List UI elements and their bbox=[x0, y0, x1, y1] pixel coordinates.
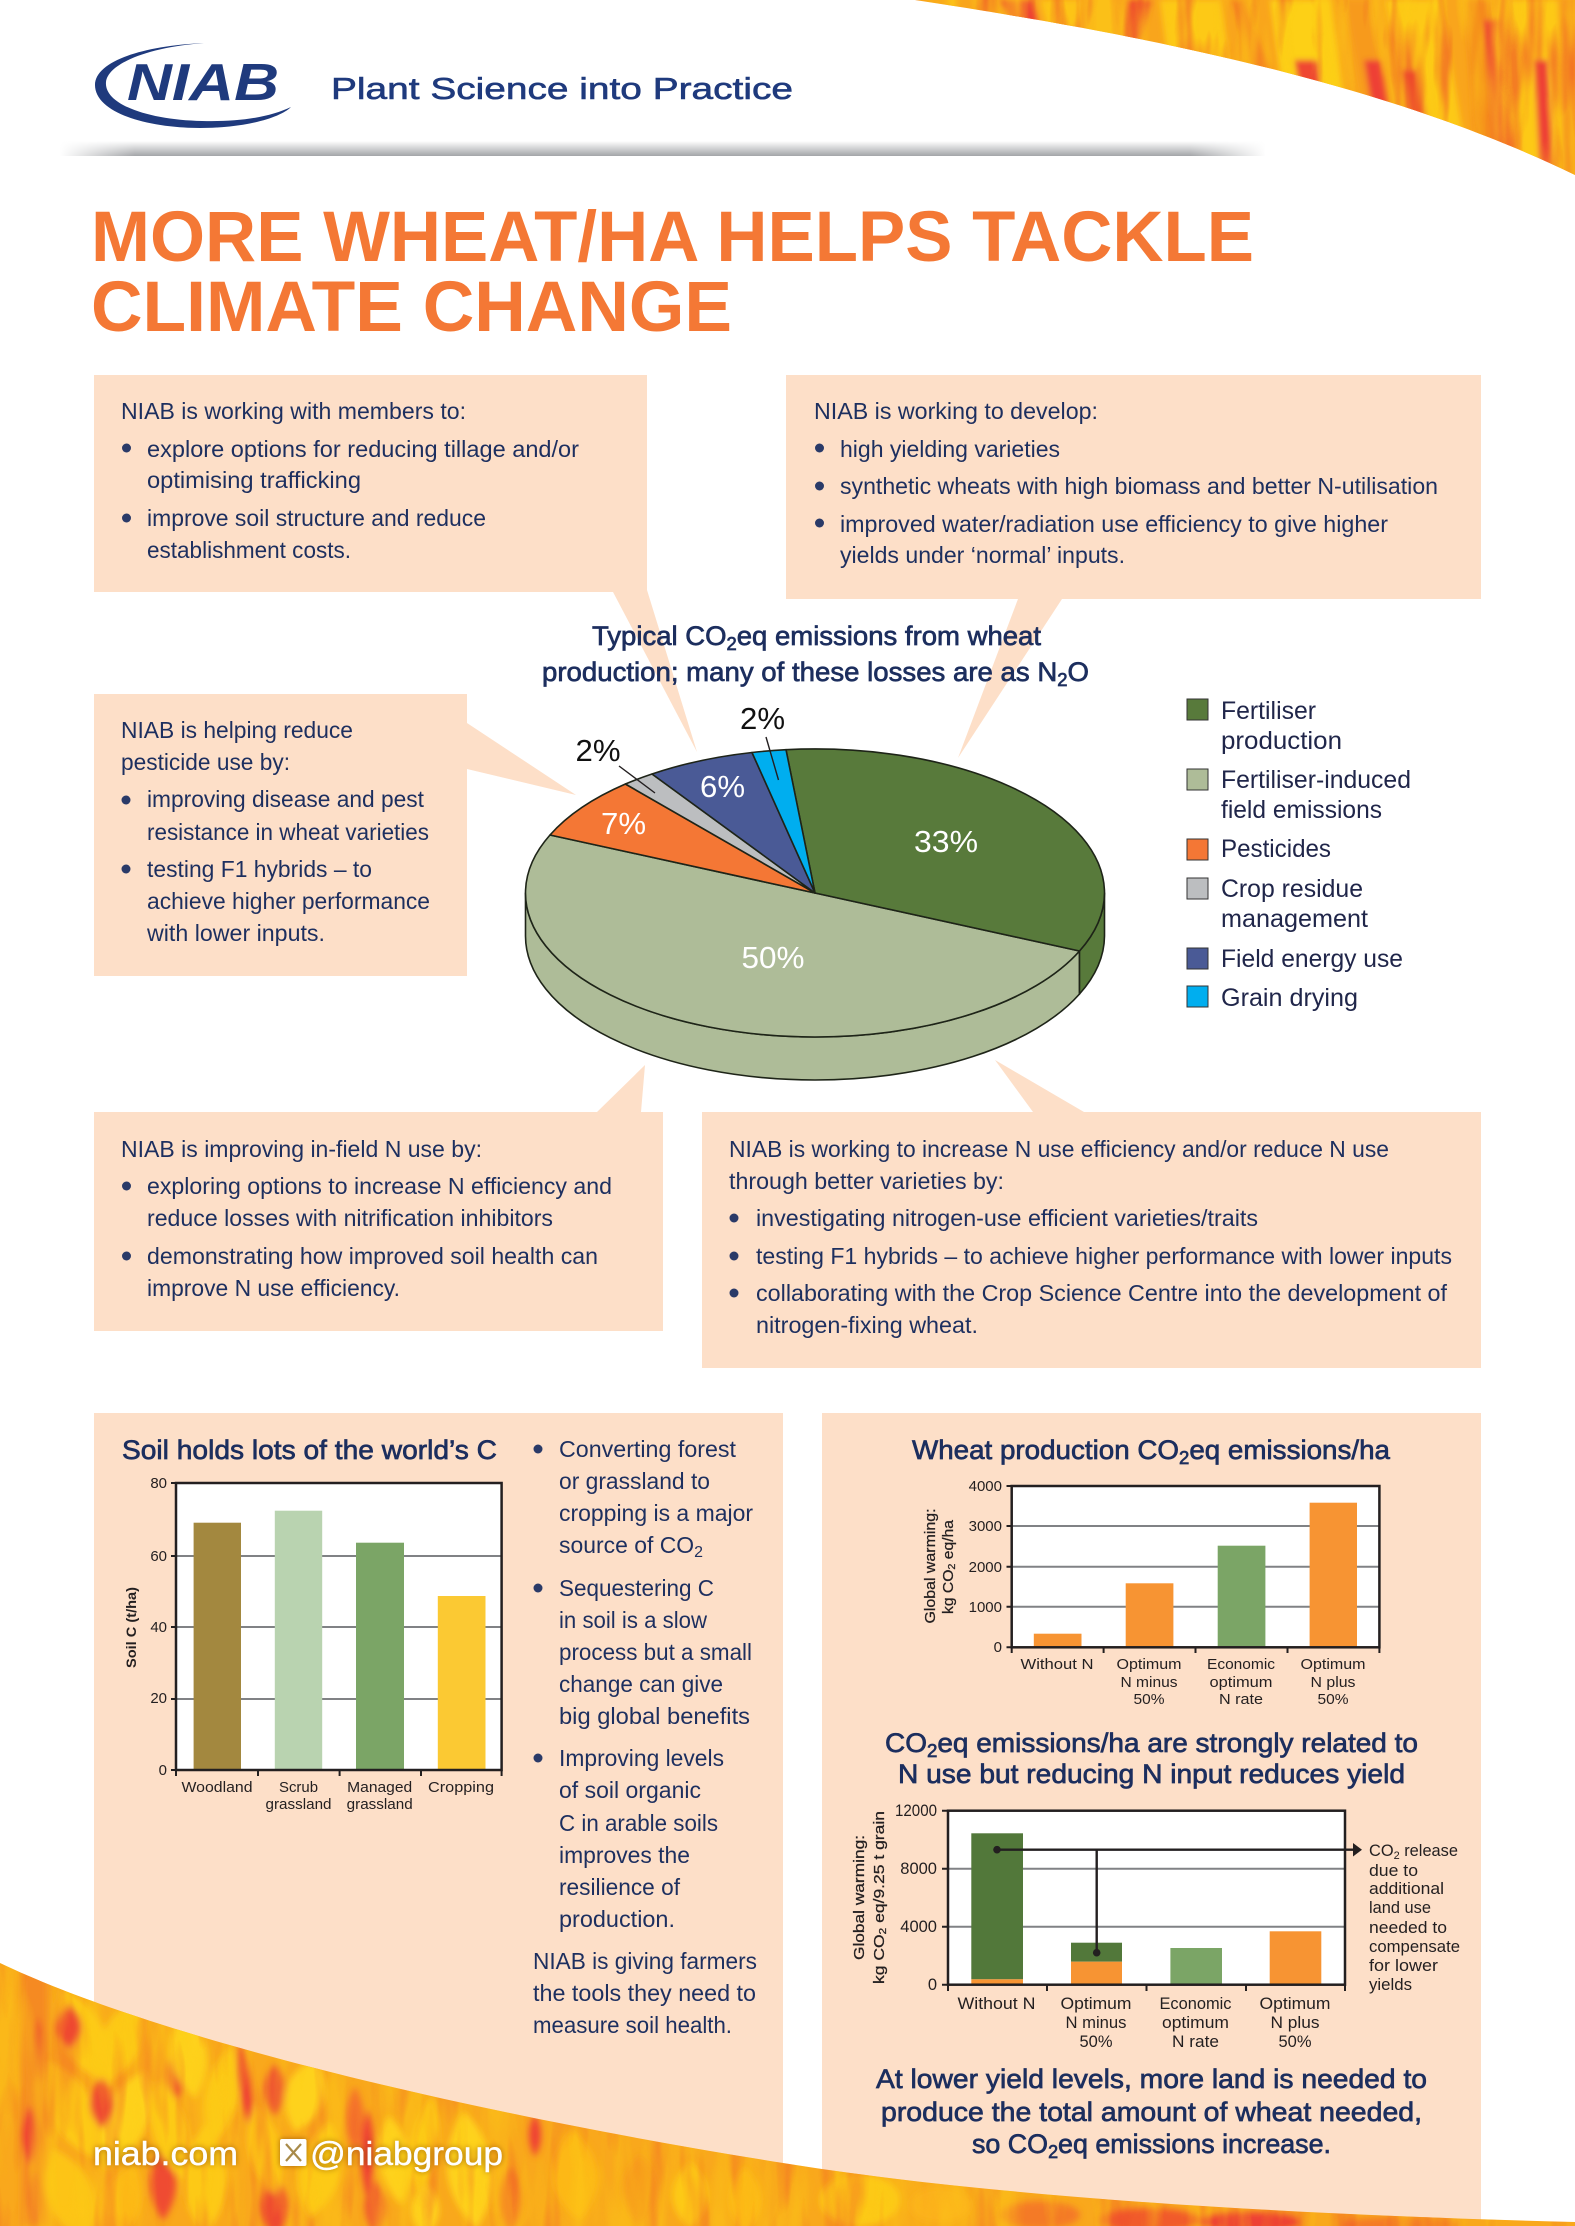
panel: in-field N use: NIAB is improving in-field N use by: bbox=[121, 1136, 482, 1162]
pie legend: Fertiliser-induced bbox=[1221, 766, 1411, 794]
panel: pesticide use: with lower inputs. bbox=[146, 920, 325, 946]
note: CO2 release: additional bbox=[1369, 1880, 1444, 1898]
pie chart: CO2eq emissions: 33% bbox=[914, 824, 978, 859]
panel: wheat production emissions bbox=[822, 1413, 1481, 2226]
leader lines bbox=[619, 737, 778, 793]
bar chart: emissions per yield: N rate bbox=[1172, 2033, 1219, 2051]
note: CO2 release: yields bbox=[1369, 1976, 1412, 1994]
slice: grain drying 2% bbox=[752, 750, 815, 893]
pie legend: field emissions bbox=[1221, 796, 1382, 824]
pie chart heading: eq emissions from wheat bbox=[737, 621, 1042, 651]
heading: emissions per ha: Wheat production CO bbox=[912, 1435, 1172, 1465]
callout box with pointer bbox=[786, 375, 1481, 758]
note: CO2 release: CO bbox=[1369, 1842, 1394, 1860]
heading: related to N use: 2 bbox=[927, 1741, 937, 1761]
bar chart: emissions per yield: 2 bbox=[878, 1927, 889, 1934]
note: CO2 release: compensate bbox=[1369, 1938, 1460, 1956]
panel: pesticide use: testing F1 hybrids – to bbox=[147, 856, 372, 882]
slice: crop residue 2% bbox=[625, 774, 815, 893]
panel: soil carbon bbox=[94, 1413, 783, 2226]
panel: in-field N use: improve N use efficiency. bbox=[147, 1275, 400, 1301]
heading: emissions per ha: 2 bbox=[1179, 1448, 1189, 1468]
bar chart: emissions per ha: Without N bbox=[1020, 1656, 1094, 1673]
panel: N use efficient varieties: through better varieties by: bbox=[729, 1168, 1004, 1194]
panel: in-field N use bbox=[94, 1065, 663, 1331]
note: CO2 release: needed to bbox=[1369, 1919, 1447, 1937]
panel: pesticide use: NIAB is helping reduce bbox=[121, 717, 353, 743]
bar chart: emissions per yield: N plus bbox=[1270, 2014, 1320, 2032]
panel: pesticide use: improving disease and pest bbox=[147, 786, 425, 812]
bar chart: emissions per ha: 4000 bbox=[969, 1478, 1002, 1495]
bar chart: soil C bbox=[123, 1475, 502, 1813]
footer: social handle: @niabgroup bbox=[310, 2135, 503, 2172]
pie legend bbox=[1187, 697, 1411, 1012]
pie legend: management bbox=[1221, 905, 1368, 933]
title: MORE WHEAT/HA HELPS TACKLE bbox=[91, 198, 1254, 277]
bar chart: emissions per yield: N minus bbox=[1066, 2014, 1126, 2032]
panel: varieties: high yielding varieties bbox=[840, 436, 1060, 462]
panel: pesticide use: pesticide use by: bbox=[121, 749, 290, 775]
bar chart: soil C: Managed bbox=[347, 1779, 412, 1796]
bar chart: soil C: 60 bbox=[150, 1548, 167, 1565]
panel: tillage and trafficking: NIAB is working with members to: bbox=[121, 398, 466, 424]
panel: varieties: improved water/radiation use efficiency to give higher bbox=[840, 511, 1388, 537]
panel: varieties: NIAB is working to develop: bbox=[814, 398, 1098, 424]
bar chart: emissions per ha: kg CO bbox=[941, 1573, 957, 1614]
pie legend: production bbox=[1221, 727, 1342, 755]
bar chart: emissions per yield: 0 bbox=[928, 1976, 937, 1994]
bar chart: emissions per ha: 50% bbox=[1134, 1691, 1164, 1708]
panel: pesticide use: achieve higher performance bbox=[147, 888, 430, 914]
bar chart: soil C: Woodland bbox=[182, 1779, 252, 1796]
bar chart: emissions per yield: Global warming: bbox=[852, 1835, 868, 1960]
tagline: Plant Science into Practice bbox=[331, 71, 793, 106]
panel: in-field N use: demonstrating how improved soil health can bbox=[147, 1243, 598, 1269]
icon: X logo bbox=[280, 2139, 306, 2166]
bar chart: emissions per ha: optimum bbox=[1210, 1674, 1272, 1691]
bullet list: soil carbon: or grassland to bbox=[559, 1468, 710, 1494]
pie chart: CO2eq emissions bbox=[526, 701, 1104, 1080]
panel: varieties: yields under ‘normal’ inputs. bbox=[840, 542, 1125, 568]
heading: related to N use: N use but reducing N input reduces yield bbox=[898, 1759, 1405, 1789]
pie chart heading: production; many of these losses are as N bbox=[542, 657, 1046, 687]
panel background bbox=[822, 1413, 1481, 2226]
bar chart: emissions per yield: 50% bbox=[1080, 2033, 1113, 2051]
bar chart: emissions per ha: 50% bbox=[1318, 1691, 1348, 1708]
wheat image band: top right corner bbox=[900, 0, 1575, 180]
bar chart: emissions per yield: Optimum bbox=[1060, 1995, 1132, 2013]
heading: emissions per ha: eq emissions/ha bbox=[1189, 1435, 1391, 1465]
slice: fertiliser production 33% bbox=[786, 749, 1104, 951]
bar chart: emissions per ha: 2 bbox=[947, 1563, 958, 1570]
bar chart: emissions per ha bbox=[923, 1478, 1379, 1708]
bullet list: soil carbon bbox=[533, 1436, 757, 2038]
panel: tillage and trafficking: explore options for reducing tillage and/or bbox=[147, 436, 579, 462]
bar chart: emissions per ha: eq/ha bbox=[941, 1519, 957, 1564]
callout box with pointer bbox=[94, 694, 576, 976]
panel: pesticide use bbox=[94, 694, 576, 976]
pie legend: Crop residue bbox=[1221, 875, 1363, 903]
panel: in-field N use: exploring options to increase N efficiency and bbox=[147, 1173, 612, 1199]
pie side wall bbox=[526, 893, 1080, 1080]
panel: pesticide use: resistance in wheat varieties bbox=[147, 819, 429, 845]
title: CLIMATE CHANGE bbox=[91, 268, 732, 347]
pie chart: CO2eq emissions: 50% bbox=[742, 940, 804, 975]
pie legend: Field energy use bbox=[1221, 945, 1403, 973]
slice: field energy 6% bbox=[652, 752, 815, 893]
conclusion text: At lower yield levels, more land is needed to bbox=[876, 2064, 1427, 2094]
bullet list: soil carbon: improves the bbox=[559, 1842, 690, 1868]
panel: tillage and trafficking: establishment costs. bbox=[147, 537, 351, 563]
panel: N use efficient varieties: collaborating with the Crop Science Centre into the development of bbox=[756, 1280, 1448, 1306]
bullet list: soil carbon: the tools they need to bbox=[533, 1980, 756, 2006]
bullet list: soil carbon: big global benefits bbox=[559, 1703, 750, 1729]
bar chart: emissions per yield: kg CO bbox=[872, 1943, 888, 1984]
bullet list: soil carbon: Sequestering C bbox=[559, 1575, 714, 1601]
arrow: CO2 release bbox=[993, 1843, 1362, 1956]
slice: field emissions 50% bbox=[526, 835, 1080, 1037]
panel: N use efficient varieties: investigating nitrogen-use efficient varieties/traits bbox=[756, 1205, 1258, 1231]
bar chart: emissions per ha: N plus bbox=[1310, 1674, 1356, 1691]
bar chart: emissions per yield: Optimum bbox=[1260, 1995, 1330, 2013]
bullet list: soil carbon: measure soil health. bbox=[533, 2012, 732, 2038]
bar chart: soil C: 20 bbox=[150, 1690, 167, 1707]
bullet list: soil carbon: in soil is a slow bbox=[559, 1607, 707, 1633]
pie chart heading: 2 bbox=[1057, 670, 1068, 690]
heading: related to N use bbox=[885, 1728, 1418, 1789]
bullet list: soil carbon: Converting forest bbox=[559, 1436, 737, 1462]
bar chart: emissions per ha: Optimum bbox=[1116, 1656, 1182, 1673]
note: CO2 release: 2 bbox=[1394, 1850, 1400, 1862]
bar chart: emissions per ha: 0 bbox=[994, 1639, 1002, 1656]
callout box with pointer bbox=[94, 1065, 663, 1331]
slice: pesticides 7% bbox=[550, 784, 815, 893]
pie legend: Grain drying bbox=[1221, 984, 1358, 1012]
pie legend: Fertiliser bbox=[1221, 697, 1316, 725]
bar chart: emissions per ha: 3000 bbox=[969, 1518, 1002, 1535]
bar chart: soil C: Scrub bbox=[279, 1779, 318, 1796]
conclusion text: so CO bbox=[972, 2129, 1049, 2159]
panel: varieties: synthetic wheats with high biomass and better N-utilisation bbox=[840, 473, 1438, 499]
bar chart: soil C: grassland bbox=[266, 1796, 332, 1813]
wheat image band: bottom bbox=[0, 1950, 1575, 2226]
bullet list: soil carbon: C in arable soils bbox=[559, 1810, 718, 1836]
bar chart: emissions per ha: 1000 bbox=[969, 1599, 1002, 1616]
note: CO2 release: release bbox=[1400, 1842, 1458, 1860]
bullet list: soil carbon: cropping is a major bbox=[559, 1500, 753, 1526]
bar chart: soil C: Cropping bbox=[428, 1779, 494, 1796]
panel: varieties bbox=[786, 375, 1481, 758]
bullet list: soil carbon: resilience of bbox=[559, 1874, 681, 1900]
bar chart: emissions per yield: 12000 bbox=[895, 1802, 937, 1820]
callout box with pointer bbox=[702, 1060, 1481, 1368]
panel: N use efficient varieties: nitrogen-fixing wheat. bbox=[756, 1312, 978, 1338]
conclusion text: 2 bbox=[1048, 2142, 1058, 2162]
panel: N use efficient varieties: NIAB is working to increase N use efficiency and/or reduce N use bbox=[729, 1136, 1389, 1162]
bullet list: soil carbon: NIAB is giving farmers bbox=[533, 1948, 757, 1974]
bar chart: emissions per yield: 50% bbox=[1278, 2033, 1312, 2051]
pie chart: CO2eq emissions: 6% bbox=[700, 769, 745, 804]
bar chart: emissions per ha: Optimum bbox=[1300, 1656, 1366, 1673]
pie chart heading: Typical CO bbox=[592, 621, 724, 651]
pie chart heading bbox=[542, 621, 1089, 690]
footer: website: niab.com bbox=[93, 2135, 238, 2172]
panel background bbox=[94, 1413, 783, 2226]
pie chart: CO2eq emissions: 7% bbox=[601, 806, 646, 841]
note: CO2 release bbox=[1369, 1842, 1460, 1994]
title bbox=[91, 198, 1254, 347]
bar chart: emissions per ha: N rate bbox=[1219, 1691, 1263, 1708]
panel: N use efficient varieties bbox=[702, 1060, 1481, 1368]
panel: in-field N use: reduce losses with nitrification inhibitors bbox=[147, 1205, 553, 1231]
heading: related to N use: CO bbox=[885, 1728, 926, 1758]
conclusion text: produce the total amount of wheat needed, bbox=[881, 2097, 1422, 2127]
logo swoosh bbox=[95, 43, 291, 128]
bar chart: emissions per yield: Economic bbox=[1160, 1995, 1232, 2013]
note: CO2 release: land use bbox=[1369, 1899, 1431, 1917]
pie chart: CO2eq emissions: 2% bbox=[576, 733, 620, 768]
bullet list: soil carbon: 2 bbox=[694, 1544, 703, 1561]
panel: tillage and trafficking: optimising trafficking bbox=[147, 467, 361, 493]
header shadow bar bbox=[60, 140, 1266, 157]
bar chart: soil C: Soil C (t/ha) bbox=[123, 1587, 139, 1668]
callout box with pointer bbox=[94, 375, 697, 752]
heading: Soil holds lots of the world’s C bbox=[122, 1435, 497, 1465]
pie chart: CO2eq emissions: 2% bbox=[740, 701, 785, 736]
bar chart: emissions per yield: 8000 bbox=[900, 1860, 937, 1878]
bar chart: emissions per ha: N minus bbox=[1120, 1674, 1178, 1691]
panel: tillage and trafficking: improve soil structure and reduce bbox=[147, 505, 486, 531]
pie chart heading: O bbox=[1068, 657, 1089, 687]
bar chart: emissions per yield: optimum bbox=[1162, 2014, 1229, 2032]
bar chart: emissions per yield bbox=[852, 1802, 1460, 2051]
heading: related to N use: eq emissions/ha are strongly related to bbox=[937, 1728, 1418, 1758]
bar chart: soil C: 40 bbox=[150, 1619, 167, 1636]
bar chart: emissions per ha: Economic bbox=[1207, 1656, 1276, 1673]
bullet list: soil carbon: source of CO bbox=[559, 1532, 694, 1558]
bar chart: soil C: 0 bbox=[159, 1762, 167, 1779]
bullet list: soil carbon: production. bbox=[559, 1906, 675, 1932]
bullet list: soil carbon: change can give bbox=[559, 1671, 723, 1697]
logo wordmark: NIAB bbox=[127, 54, 279, 112]
bullet list: soil carbon: process but a small bbox=[559, 1639, 752, 1665]
note: CO2 release: due to bbox=[1369, 1862, 1418, 1880]
bullet list: soil carbon: Improving levels bbox=[559, 1745, 724, 1771]
conclusion text: eq emissions increase. bbox=[1058, 2129, 1331, 2159]
bar chart: soil C: grassland bbox=[347, 1796, 413, 1813]
note: CO2 release: for lower bbox=[1369, 1957, 1439, 1975]
pie legend: Pesticides bbox=[1221, 835, 1331, 863]
pie chart heading: 2 bbox=[727, 634, 737, 654]
bar chart: emissions per yield: 4000 bbox=[900, 1918, 937, 1936]
bullet list: soil carbon: of soil organic bbox=[559, 1777, 701, 1803]
panel: tillage and trafficking bbox=[94, 375, 697, 752]
bar chart: emissions per ha: 2000 bbox=[969, 1559, 1002, 1576]
conclusion text bbox=[876, 2064, 1427, 2162]
bar chart: emissions per yield: Without N bbox=[958, 1995, 1036, 2013]
bar chart: emissions per yield: eq/9.25 t grain bbox=[872, 1811, 888, 1928]
bar chart: emissions per ha: Global warming: bbox=[923, 1508, 939, 1624]
bar chart: soil C: 80 bbox=[150, 1475, 167, 1492]
logo: NIAB bbox=[95, 43, 291, 128]
panel: N use efficient varieties: testing F1 hybrids – to achieve higher performance with lower inputs bbox=[756, 1243, 1452, 1269]
